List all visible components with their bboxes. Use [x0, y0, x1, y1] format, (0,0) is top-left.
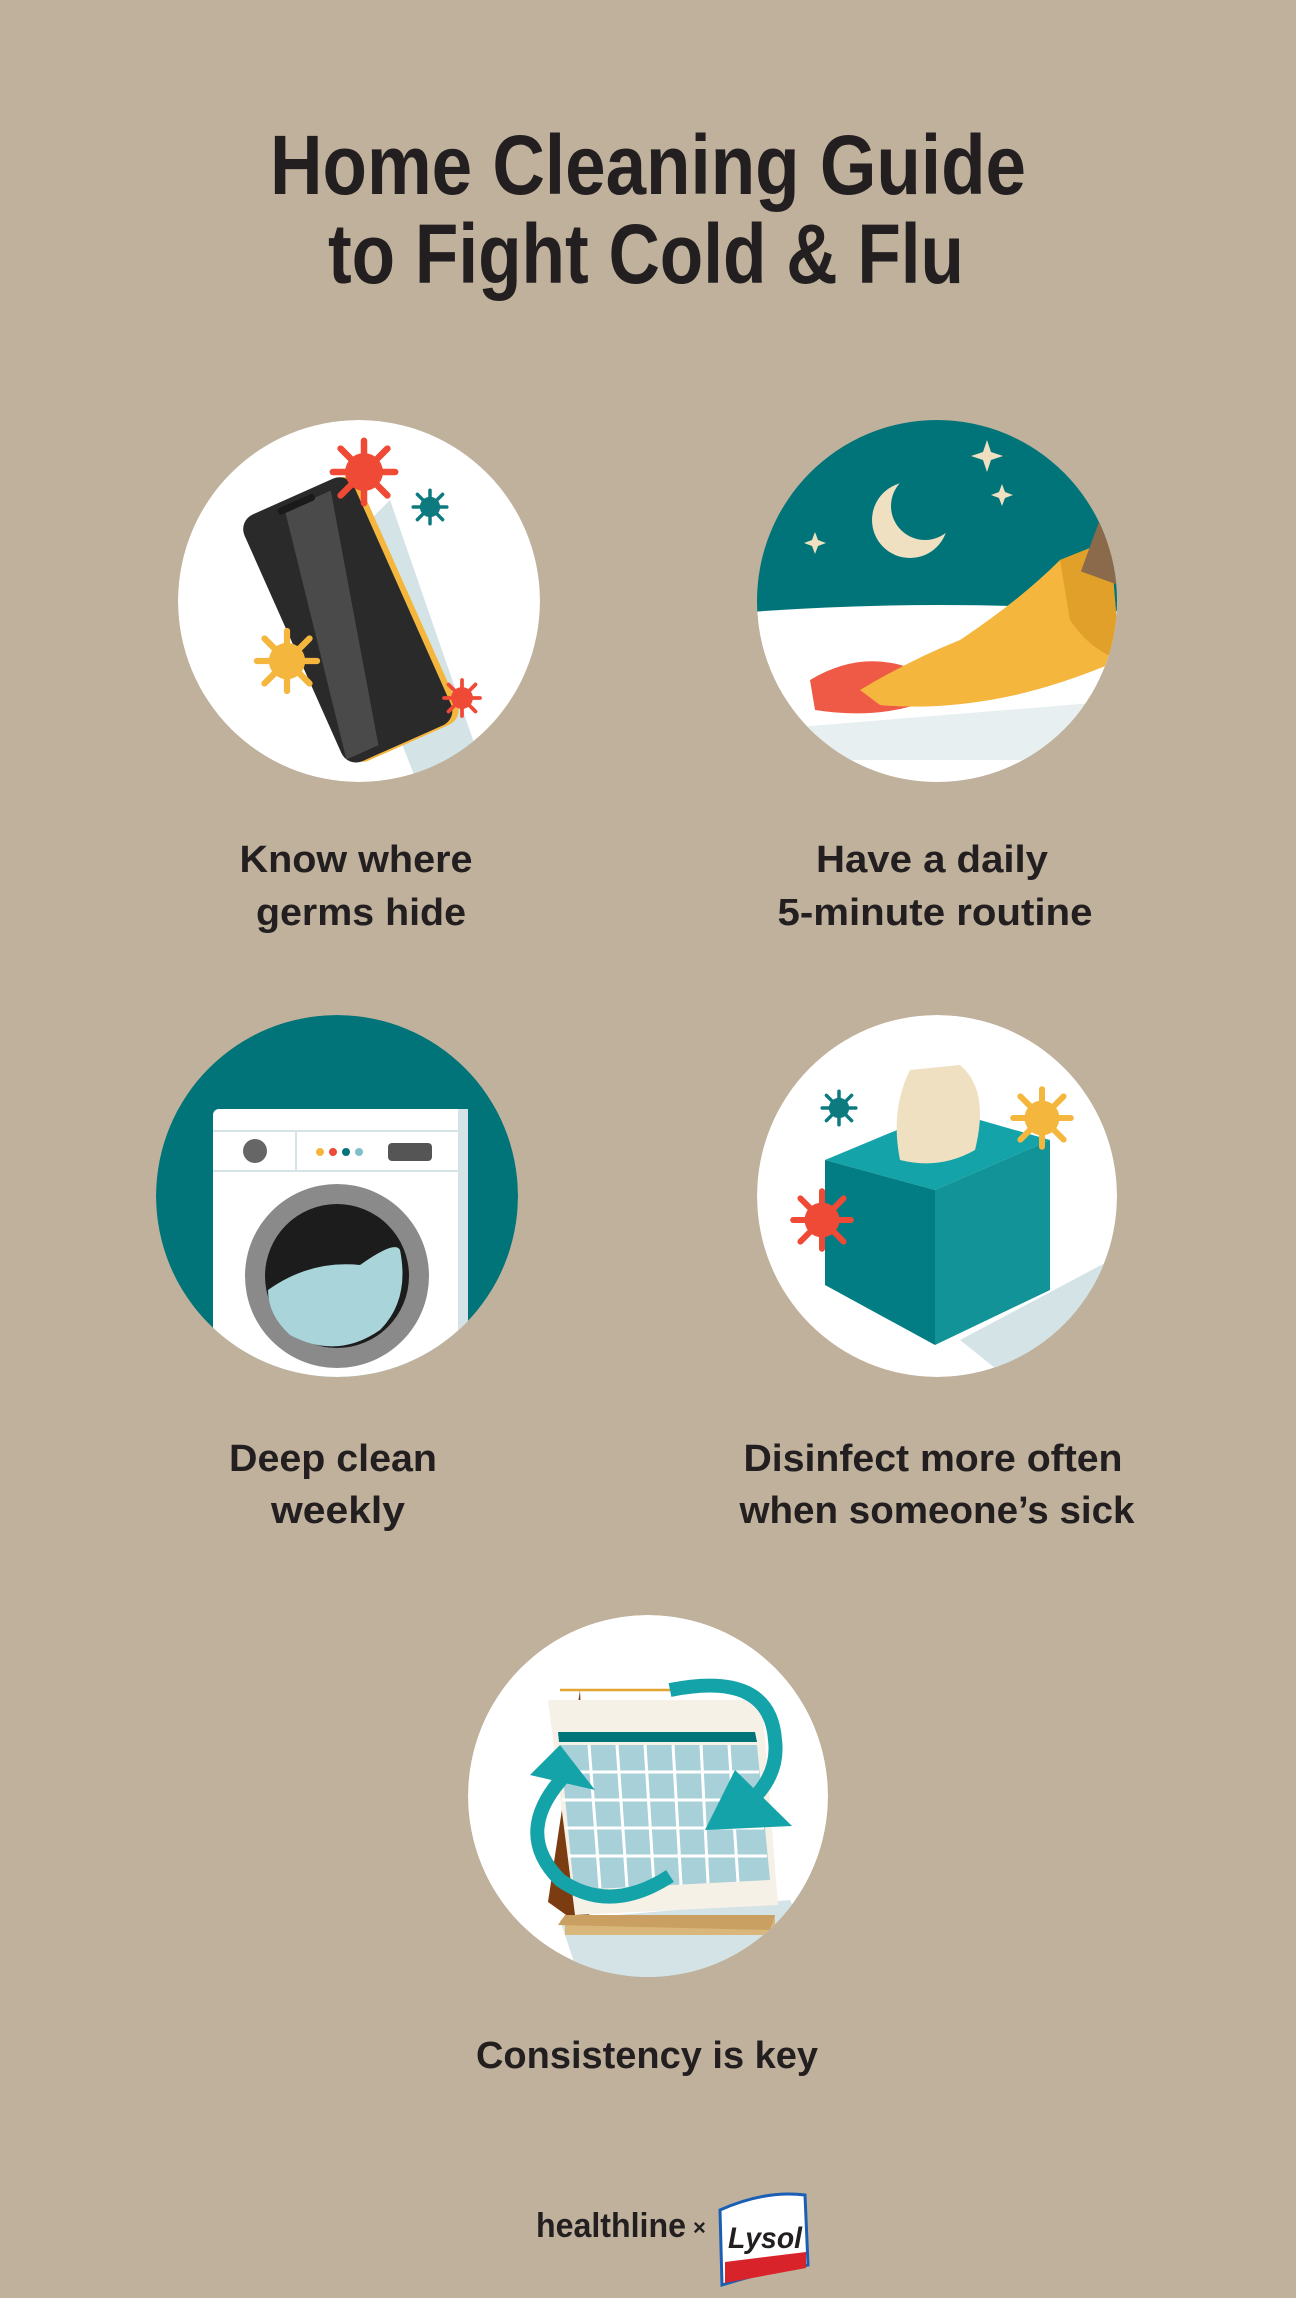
panel: washing machine illustration	[156, 1015, 518, 1409]
label: deep clean weekly: weekly	[270, 1490, 405, 1532]
icon: calendar	[548, 1690, 778, 1935]
icon: washing machine	[213, 1109, 468, 1377]
icon: phone	[238, 470, 464, 769]
icon: germs	[793, 1089, 1071, 1249]
logo: healthline x lysol: healthline	[536, 2207, 686, 2245]
logo: healthline x lysol	[536, 2194, 808, 2285]
panel: night wiping illustration	[757, 420, 1117, 782]
title	[270, 118, 1026, 301]
label: daily 5-minute routine: 5-minute routine	[778, 892, 1092, 934]
label: disinfect more often: when someone’s sick	[738, 1490, 1135, 1532]
icon: gloved hand and cloth	[810, 661, 910, 714]
icon: tissue box	[825, 1065, 1050, 1345]
label: daily 5-minute routine: Have a daily	[816, 839, 1048, 881]
label: daily 5-minute routine	[778, 839, 1092, 934]
label: disinfect more often	[738, 1438, 1135, 1532]
label: know where germs hide: Know where	[240, 839, 472, 881]
title: Home Cleaning Guide	[270, 118, 1026, 212]
icon: germs	[257, 441, 480, 716]
panel: tissue box illustration	[757, 1015, 1130, 1380]
arrow: circular	[537, 1686, 776, 1897]
logo: healthline x lysol: Lysol	[728, 2222, 803, 2255]
label: know where germs hide	[240, 839, 472, 934]
icon: stars	[804, 440, 1013, 554]
panel: calendar illustration	[468, 1615, 830, 1980]
label: deep clean weekly	[229, 1438, 437, 1532]
label: consistency is key: Consistency is key	[476, 2035, 818, 2077]
label: know where germs hide: germs hide	[256, 892, 466, 934]
title: to Fight Cold & Flu	[328, 207, 964, 301]
logo: healthline x lysol: ×	[693, 2215, 706, 2240]
icon: moon	[872, 482, 948, 558]
label: disinfect more often: Disinfect more often	[744, 1438, 1122, 1480]
panel: phone germs illustration	[178, 420, 540, 790]
label: deep clean weekly: Deep clean	[229, 1438, 437, 1480]
